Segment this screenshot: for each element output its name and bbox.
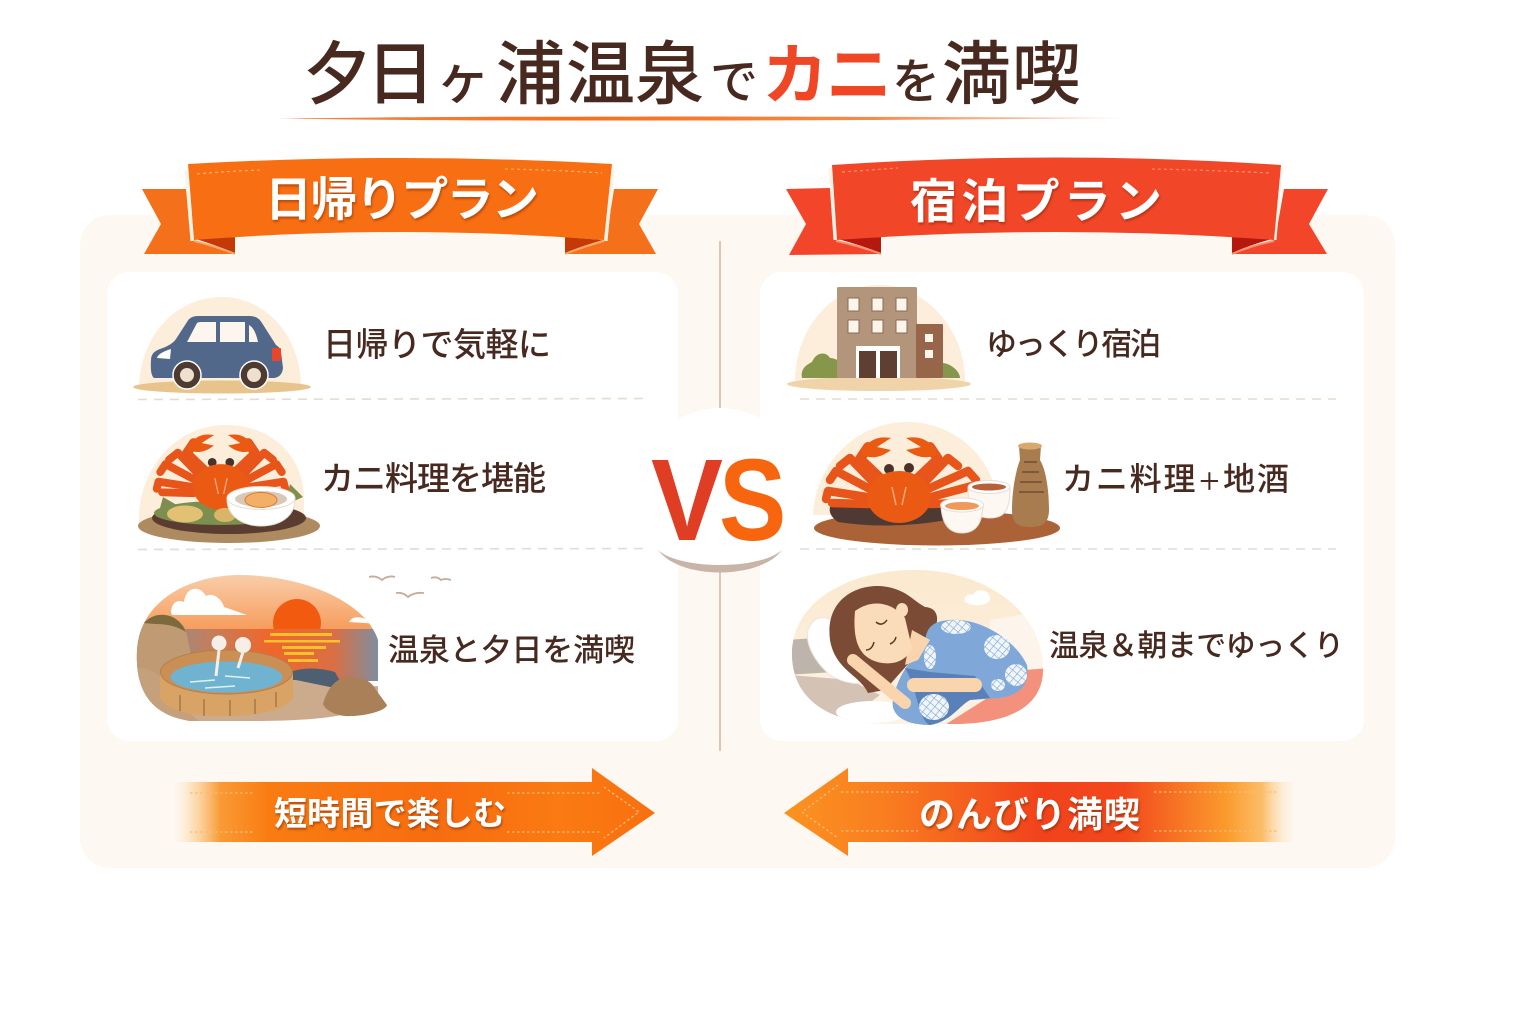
VS text <box>651 435 786 566</box>
icon: crab with sake <box>813 422 1060 546</box>
title: 日 <box>366 36 435 113</box>
icon: seaside hot spring at sunset <box>136 575 452 721</box>
title: で <box>710 56 758 109</box>
title: 泉 <box>635 36 704 113</box>
panel: comparison background <box>80 215 1395 868</box>
label: onsen and sunset: 温泉と夕日を満喫 <box>388 633 635 668</box>
icon: crab plate <box>138 425 320 543</box>
banner label: 宿泊プラン <box>910 175 1162 228</box>
title: を <box>892 56 940 109</box>
banner: day trip plan <box>142 158 658 254</box>
label: crab cuisine and local sake: カニ料理＋地酒 <box>1062 461 1289 497</box>
label: stay relaxed: ゆっくり宿泊 <box>986 327 1161 362</box>
title: 喫 <box>1012 36 1081 113</box>
title <box>303 36 1081 113</box>
centre divider <box>719 241 721 751</box>
title: ヶ <box>436 50 490 110</box>
arrow: leisurely enjoyment <box>784 768 1298 856</box>
small cloud <box>965 590 990 605</box>
label: day trip casual: 日帰りで気軽に <box>323 326 551 363</box>
title: 夕 <box>303 36 372 113</box>
VS badge <box>638 408 802 572</box>
title: ニ <box>826 38 892 112</box>
kimono <box>893 620 1028 725</box>
face and arms <box>853 603 975 703</box>
banner label: 日帰りプラン <box>265 173 539 226</box>
title: 温 <box>566 36 635 113</box>
VS text: V <box>651 435 723 565</box>
ribbon body <box>188 158 612 240</box>
bowl <box>227 486 295 526</box>
crab <box>826 437 976 523</box>
arrow label: 短時間で楽しむ <box>274 795 506 832</box>
sake cups <box>940 480 1010 533</box>
arrow label: のんびり満喫 <box>919 794 1140 835</box>
title underline <box>278 117 1120 121</box>
icon: woman sleeping in yukata <box>792 570 1044 725</box>
ribbon tails <box>786 168 1328 255</box>
row dividers <box>138 398 1336 550</box>
sake bottle <box>1012 442 1049 527</box>
ribbon tails <box>142 170 658 254</box>
icon: car <box>133 297 311 394</box>
infographic canvas <box>80 39 1395 868</box>
ribbon body <box>832 158 1281 240</box>
panel: overnight card <box>760 272 1364 741</box>
rock <box>323 677 387 716</box>
banner: overnight plan <box>786 158 1328 255</box>
hot spring tub <box>160 636 293 716</box>
icon: hotel <box>787 285 971 391</box>
title: カ <box>762 38 828 112</box>
seagulls <box>369 576 451 597</box>
VS text: S <box>719 437 786 566</box>
label: onsen and relaxed morning: 温泉＆朝までゆっくり <box>1049 630 1344 663</box>
panel: day trip card <box>107 272 678 741</box>
title: 満 <box>942 36 1011 113</box>
pillow <box>807 618 870 683</box>
title: 浦 <box>496 36 565 113</box>
crab <box>157 434 285 510</box>
hair <box>829 586 937 693</box>
arrow: short time enjoyment <box>172 768 655 856</box>
label: crab cuisine: カニ料理を堪能 <box>321 460 546 497</box>
